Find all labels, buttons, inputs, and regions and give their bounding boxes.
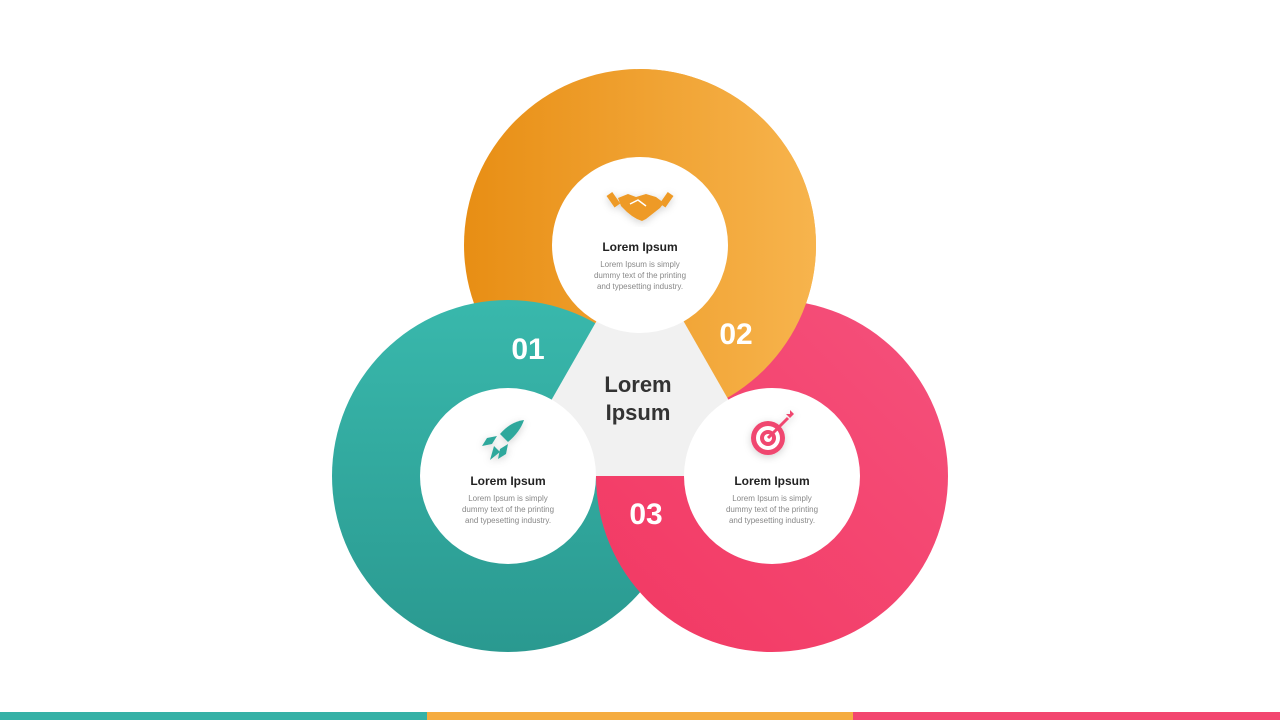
inner circle: pink: dummy text of the printing bbox=[726, 505, 818, 514]
bottom color bar bbox=[0, 712, 1280, 720]
center triangle bbox=[508, 245, 772, 476]
ring: orange bbox=[464, 69, 816, 421]
number 02: 02 bbox=[719, 318, 753, 351]
icon: target bbox=[751, 410, 794, 455]
number 01: 01 bbox=[511, 333, 545, 366]
inner circle: orange: Lorem Ipsum bbox=[602, 240, 678, 254]
inner circle: teal bbox=[420, 388, 596, 564]
icon: handshake bbox=[607, 192, 673, 221]
number 03: 03 bbox=[629, 498, 663, 531]
ring: orange overlap bbox=[641, 69, 816, 398]
inner circle: orange bbox=[552, 157, 728, 333]
inner circle: teal: Lorem Ipsum is simply bbox=[468, 494, 548, 503]
icon: rocket bbox=[482, 420, 524, 460]
inner circle: pink: Lorem Ipsum bbox=[734, 474, 810, 488]
inner circle: teal: and typesetting industry. bbox=[465, 516, 551, 525]
inner circle: teal: Lorem Ipsum bbox=[470, 474, 546, 488]
center title: Lorem bbox=[604, 372, 672, 397]
inner circle: teal: dummy text of the printing bbox=[462, 505, 554, 514]
ring: pink bbox=[596, 300, 948, 652]
inner circle: orange: and typesetting industry. bbox=[597, 282, 683, 291]
center title: Ipsum bbox=[606, 400, 670, 425]
center title bbox=[604, 372, 672, 425]
inner circle: orange: Lorem Ipsum is simply bbox=[600, 260, 680, 269]
inner circle: pink bbox=[684, 388, 860, 564]
inner circle: orange: dummy text of the printing bbox=[594, 271, 686, 280]
inner circle: pink: and typesetting industry. bbox=[729, 516, 815, 525]
inner circle: pink: Lorem Ipsum is simply bbox=[732, 494, 812, 503]
ring: teal bbox=[332, 300, 684, 652]
